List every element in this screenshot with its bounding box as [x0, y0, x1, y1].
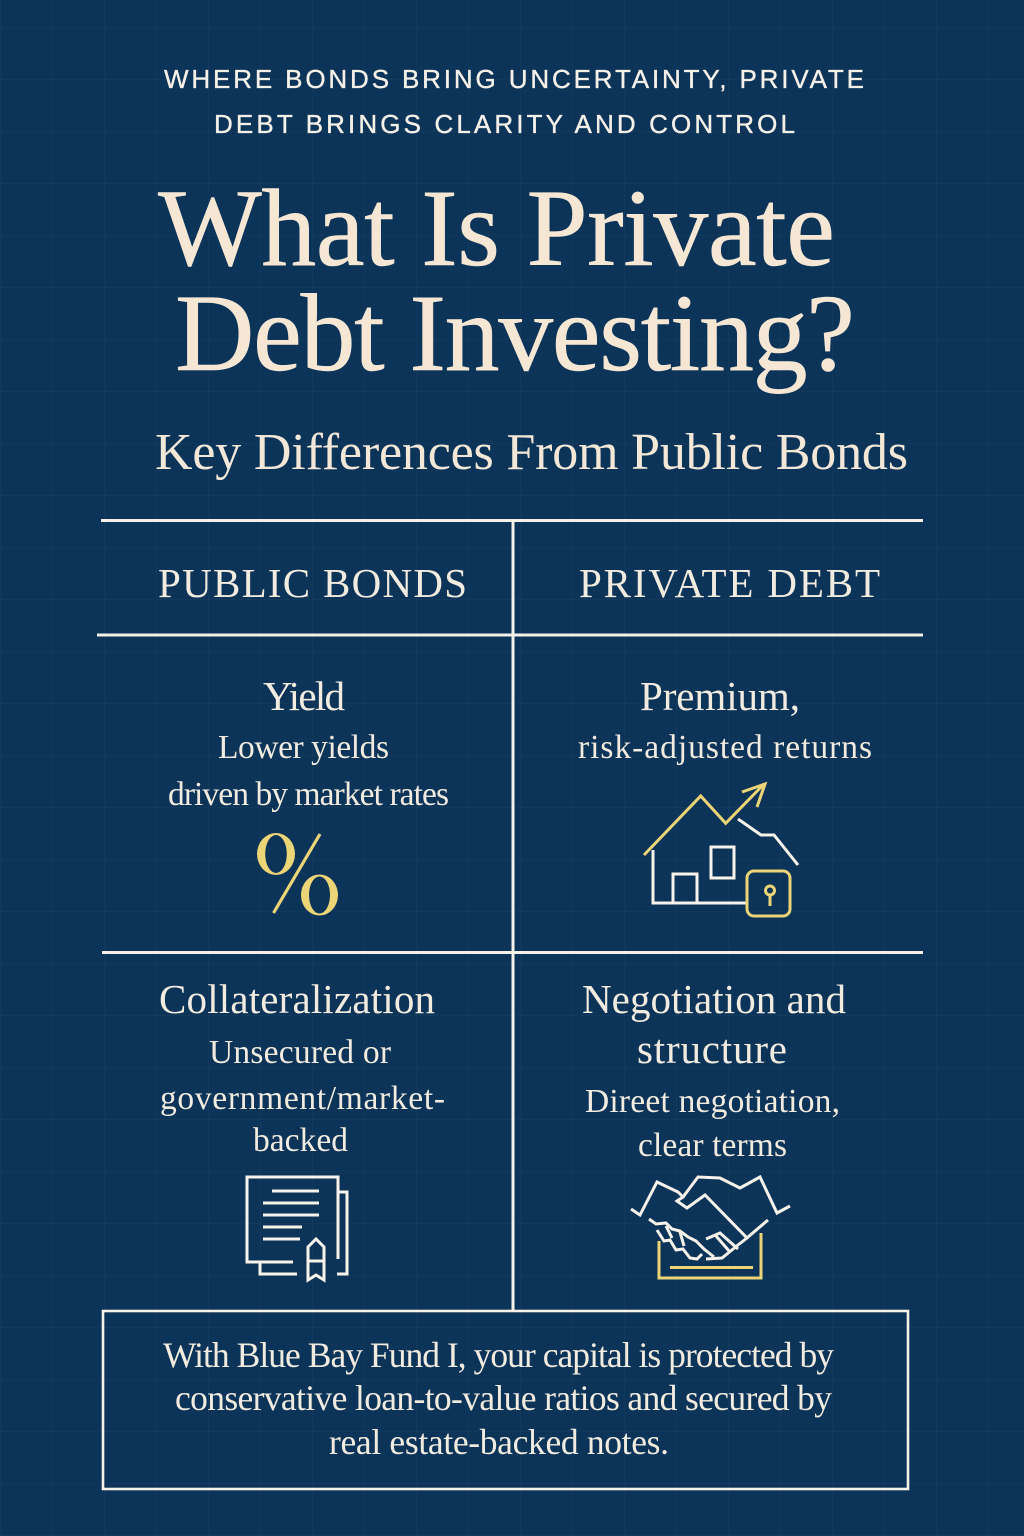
cell: yield: Yield [263, 673, 345, 719]
column heading: private debt: PRIVATE DEBT [579, 560, 880, 606]
callout box: conservative loan-to-value ratios and secured by [175, 1378, 832, 1418]
callout box [103, 1311, 908, 1489]
cell: negotiation and structure: Negotiation and [582, 976, 846, 1022]
icon: house with rising arrow and lock [644, 784, 798, 916]
cell: collateralization [159, 976, 445, 1159]
cell: collateralization: government/market- [160, 1080, 445, 1117]
cell: premium [578, 673, 872, 766]
title: Debt Investing? [175, 272, 855, 394]
cell: negotiation and structure: Direet negotiation, [585, 1083, 840, 1120]
cell: negotiation and structure: structure [637, 1026, 787, 1072]
icon: handshake over tray [631, 1177, 790, 1278]
callout box: real estate-backed notes. [329, 1422, 669, 1462]
comparison table rules [97, 520, 923, 1311]
icon: document with ribbon [247, 1177, 347, 1280]
title [158, 167, 855, 394]
cell: premium: risk-adjusted returns [578, 729, 872, 766]
column heading: public bonds: PUBLIC BONDS [158, 560, 467, 606]
icon: percent [257, 833, 338, 916]
cell: collateralization: Unsecured or [209, 1034, 391, 1071]
subtitle: Key Differences From Public Bonds [155, 424, 908, 481]
cell: collateralization: Collateralization [159, 976, 435, 1022]
cell: premium: Premium, [640, 673, 800, 719]
eyebrow text: DEBT BRINGS CLARITY AND CONTROL [214, 109, 795, 139]
eyebrow text [164, 64, 864, 139]
callout box: With Blue Bay Fund I, your capital is protected by [163, 1335, 834, 1375]
title: What Is Private [158, 167, 835, 289]
cell: collateralization: backed [253, 1122, 348, 1159]
cell: negotiation and structure: clear terms [638, 1127, 787, 1164]
eyebrow text: WHERE BONDS BRING UNCERTAINTY, PRIVATE [164, 64, 864, 94]
cell: negotiation and structure [582, 976, 846, 1164]
cell: yield [168, 673, 449, 813]
cell: yield: Lower yields [218, 729, 389, 766]
cell: yield: driven by market rates [168, 776, 449, 813]
